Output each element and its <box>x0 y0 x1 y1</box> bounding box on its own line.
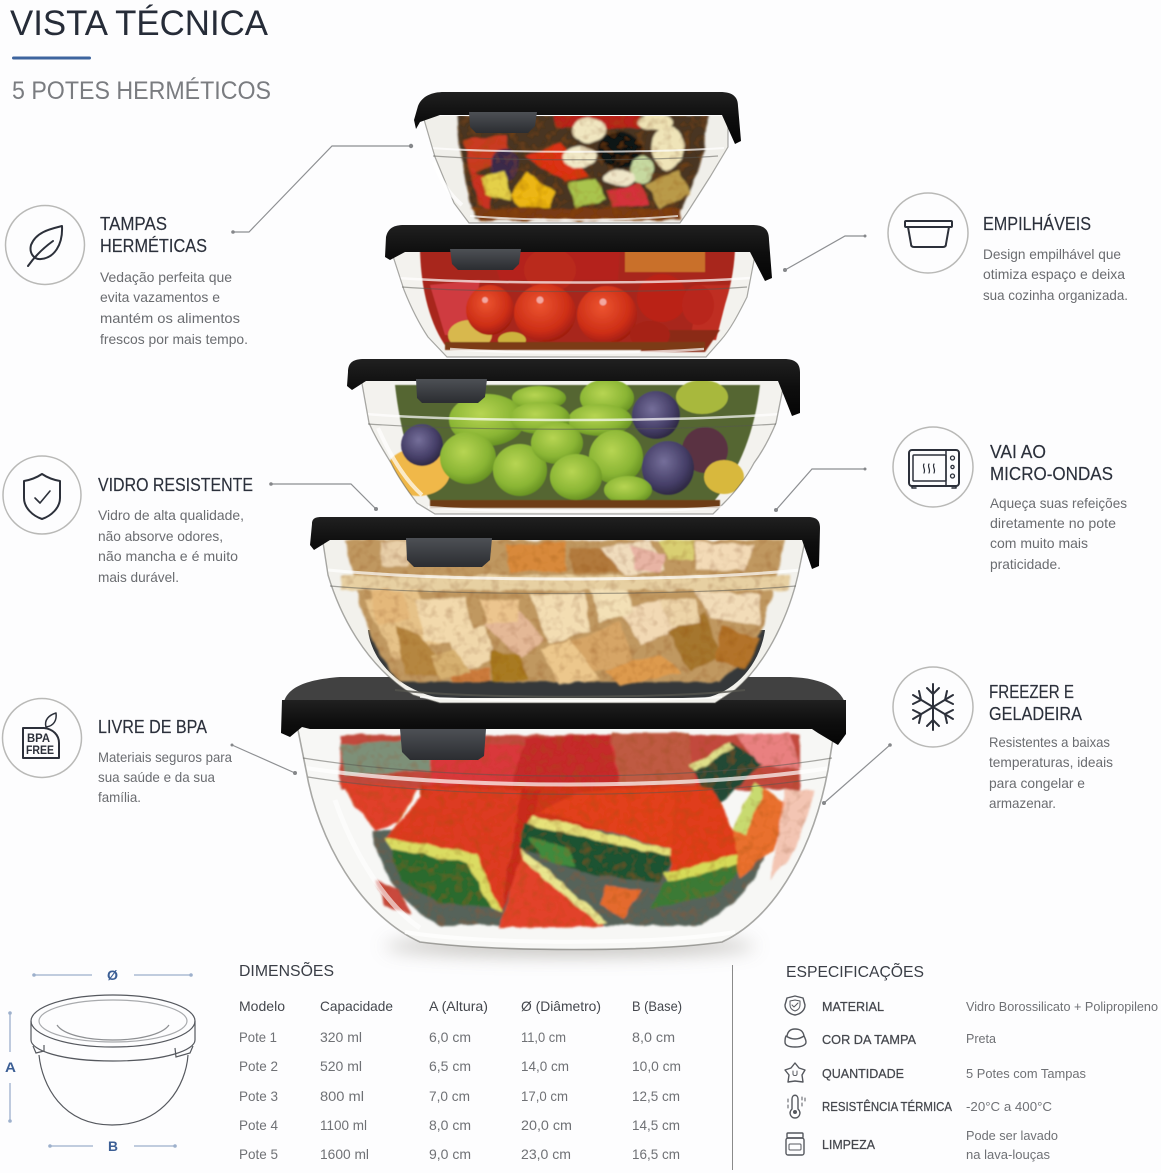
text block: Materiais seguros para <box>98 749 232 765</box>
row: pote 2: 10,0 cm <box>632 1058 681 1074</box>
text block: não mancha e é muito <box>98 548 238 564</box>
glass highlights <box>391 250 756 357</box>
text block: sua cozinha organizada. <box>983 287 1128 303</box>
glass highlights <box>361 378 785 514</box>
row: quantidade <box>785 1063 1086 1082</box>
row: resistência térmica: RESISTÊNCIA TÉRMICA <box>822 1099 952 1114</box>
row: pote 4: 1100 ml <box>320 1117 367 1133</box>
row: cor da tampa: Preta <box>966 1031 997 1046</box>
dimension: diameter <box>32 967 193 983</box>
container 4: chicken <box>310 517 820 703</box>
lid 3 <box>347 359 800 416</box>
text block: otimiza espaço e deixa <box>983 266 1125 282</box>
row: cor da tampa <box>785 1029 997 1047</box>
row: material: Vidro Borossilicato + Polipropileno <box>966 999 1158 1014</box>
row: pote 3: 12,5 cm <box>632 1088 680 1104</box>
glass highlights <box>423 116 728 223</box>
row: pote 2: 6,5 cm <box>429 1058 471 1074</box>
row: pote 1: 8,0 cm <box>632 1029 675 1045</box>
icon: microwave <box>893 427 973 507</box>
leader line: vidro <box>269 482 378 511</box>
text block <box>98 749 232 805</box>
glass highlights <box>296 720 836 950</box>
text block: com muito mais <box>990 535 1088 551</box>
row: quantidade: 5 Potes com Tampas <box>966 1066 1086 1081</box>
heading: TAMPAS <box>100 214 167 234</box>
container outline <box>31 995 195 1125</box>
row: pote 5: 16,5 cm <box>632 1146 680 1162</box>
text block: Vedação perfeita que <box>100 269 232 285</box>
title: VISTA TÉCNICA <box>10 4 269 43</box>
row: limpeza: LIMPEZA <box>822 1137 875 1152</box>
icon: bpa free: FREE <box>26 745 54 757</box>
row: pote 2 <box>239 1058 681 1074</box>
heading: FREEZER E <box>989 682 1074 702</box>
dimension: height <box>5 1011 16 1123</box>
panel: tampas herméticas <box>6 206 248 347</box>
leader line: tampas <box>231 144 413 234</box>
row: pote 3: 800 ml <box>320 1088 364 1104</box>
row: limpeza <box>786 1128 1058 1162</box>
row: pote 4: 20,0 cm <box>521 1117 572 1133</box>
row: pote 1 <box>239 1029 675 1045</box>
dimension: diameter: Ø <box>107 967 118 983</box>
icon: bpa free: BPA <box>27 733 50 745</box>
panel: especificações <box>785 961 1158 1162</box>
lid 2 <box>385 225 772 281</box>
row: resistência térmica <box>788 1095 1052 1118</box>
icon: stackable container <box>888 193 968 273</box>
text block: Vidro de alta qualidade, <box>98 507 244 523</box>
leader line: bpa <box>230 744 297 775</box>
dimension: base: B <box>108 1138 118 1154</box>
glass highlights <box>322 536 806 703</box>
table header row: B (Base) <box>632 998 682 1014</box>
text block <box>990 495 1127 572</box>
heading: LIVRE DE BPA <box>98 717 207 737</box>
text block: mais durável. <box>98 569 179 585</box>
heading: MICRO-ONDAS <box>990 464 1113 484</box>
row: pote 4 <box>239 1117 680 1133</box>
text block: temperaturas, ideais <box>989 754 1113 770</box>
heading <box>990 442 1113 484</box>
subtitle: 5 POTES HERMÉTICOS <box>12 76 271 105</box>
text block: praticidade. <box>990 556 1061 572</box>
row: material <box>785 996 1158 1015</box>
table header row: Capacidade <box>320 998 393 1014</box>
leader line: freezer <box>822 743 892 805</box>
row: pote 2: 14,0 cm <box>521 1058 569 1074</box>
diagram: container dimensions <box>5 967 195 1154</box>
text block: sua saúde e da sua <box>98 769 215 785</box>
row: pote 5: 9,0 cm <box>429 1146 471 1162</box>
table heading: DIMENSÕES <box>239 960 334 980</box>
row: pote 1: Pote 1 <box>239 1029 277 1045</box>
panel: livre de bpa <box>2 698 232 805</box>
table header row <box>239 998 682 1014</box>
heading <box>100 214 207 256</box>
heading: VIDRO RESISTENTE <box>98 475 253 495</box>
row: resistência térmica: -20°C a 400°C <box>966 1099 1052 1114</box>
text block: Design empilhável que <box>983 246 1121 262</box>
row: pote 1: 11,0 cm <box>521 1029 566 1045</box>
row: quantidade: QUANTIDADE <box>822 1066 904 1081</box>
lid 5 <box>281 677 846 760</box>
leader line: micro-ondas <box>774 468 866 512</box>
text block: diretamente no pote <box>990 515 1116 531</box>
panel: vidro resistente <box>3 456 253 585</box>
row: pote 2: 520 ml <box>320 1058 362 1074</box>
table header row: Ø (Diâmetro) <box>521 998 601 1014</box>
heading: GELADEIRA <box>989 704 1082 724</box>
text block: frescos por mais tempo. <box>100 331 248 347</box>
icon: snowflake <box>893 667 973 747</box>
text block: mantém os alimentos <box>100 310 240 326</box>
text block: Resistentes a baixas <box>989 734 1110 750</box>
text block <box>989 734 1113 811</box>
row: pote 4: Pote 4 <box>239 1117 278 1133</box>
row: limpeza: na lava-louças <box>966 1147 1050 1162</box>
text block: não absorve odores, <box>98 528 223 544</box>
row: cor da tampa: COR DA TAMPA <box>822 1032 916 1047</box>
icon: shield <box>3 456 81 534</box>
row: pote 2: Pote 2 <box>239 1058 278 1074</box>
icon: bpa free <box>2 698 82 778</box>
row: pote 1: 320 ml <box>320 1029 362 1045</box>
row: pote 3: 7,0 cm <box>429 1088 470 1104</box>
row: material: MATERIAL <box>822 999 884 1014</box>
row: limpeza: Pode ser lavado <box>966 1128 1058 1143</box>
specs heading: ESPECIFICAÇÕES <box>786 961 924 981</box>
table header row: Modelo <box>239 998 285 1014</box>
title underline <box>12 56 91 60</box>
row: pote 5: 23,0 cm <box>521 1146 571 1162</box>
heading: VAI AO <box>990 442 1046 462</box>
panel: freezer e geladeira <box>893 667 1113 811</box>
text block <box>983 246 1128 303</box>
text block: para congelar e <box>989 775 1085 791</box>
dimension: height: A <box>5 1059 16 1075</box>
heading: EMPILHÁVEIS <box>983 214 1091 234</box>
row: pote 5 <box>239 1146 680 1162</box>
row: pote 5: Pote 5 <box>239 1146 278 1162</box>
container 5: watermelon <box>281 677 846 950</box>
floor shadow <box>385 936 755 956</box>
leader line: empilhaveis <box>783 234 866 272</box>
row: pote 5: 1600 ml <box>320 1146 369 1162</box>
container 1: salad <box>414 92 741 223</box>
row: pote 1: 6,0 cm <box>429 1029 471 1045</box>
lid 1 <box>414 92 741 144</box>
dimension: base <box>48 1138 177 1154</box>
icon: leaf <box>6 206 84 284</box>
row: pote 3: Pote 3 <box>239 1088 278 1104</box>
panel: empilháveis <box>888 193 1128 303</box>
row: pote 4: 8,0 cm <box>429 1117 471 1133</box>
heading <box>989 682 1082 724</box>
photo: stack of five glass containers <box>281 92 846 956</box>
container 2: tomatoes <box>385 225 772 357</box>
table header row: A (Altura) <box>429 998 488 1014</box>
row: pote 3 <box>239 1088 680 1104</box>
text block <box>100 269 248 347</box>
container 3: grapes <box>347 359 800 514</box>
heading: HERMÉTICAS <box>100 236 207 256</box>
text block: armazenar. <box>989 795 1056 811</box>
row: pote 3: 17,0 cm <box>521 1088 568 1104</box>
text block: Aqueça suas refeições <box>990 495 1127 511</box>
row: pote 4: 14,5 cm <box>632 1117 680 1133</box>
lid 4 <box>310 517 820 569</box>
text block <box>98 507 244 585</box>
text block: família. <box>98 789 141 805</box>
table: dimensões <box>239 960 682 1162</box>
panel: micro-ondas <box>893 427 1127 572</box>
text block: evita vazamentos e <box>100 289 220 305</box>
